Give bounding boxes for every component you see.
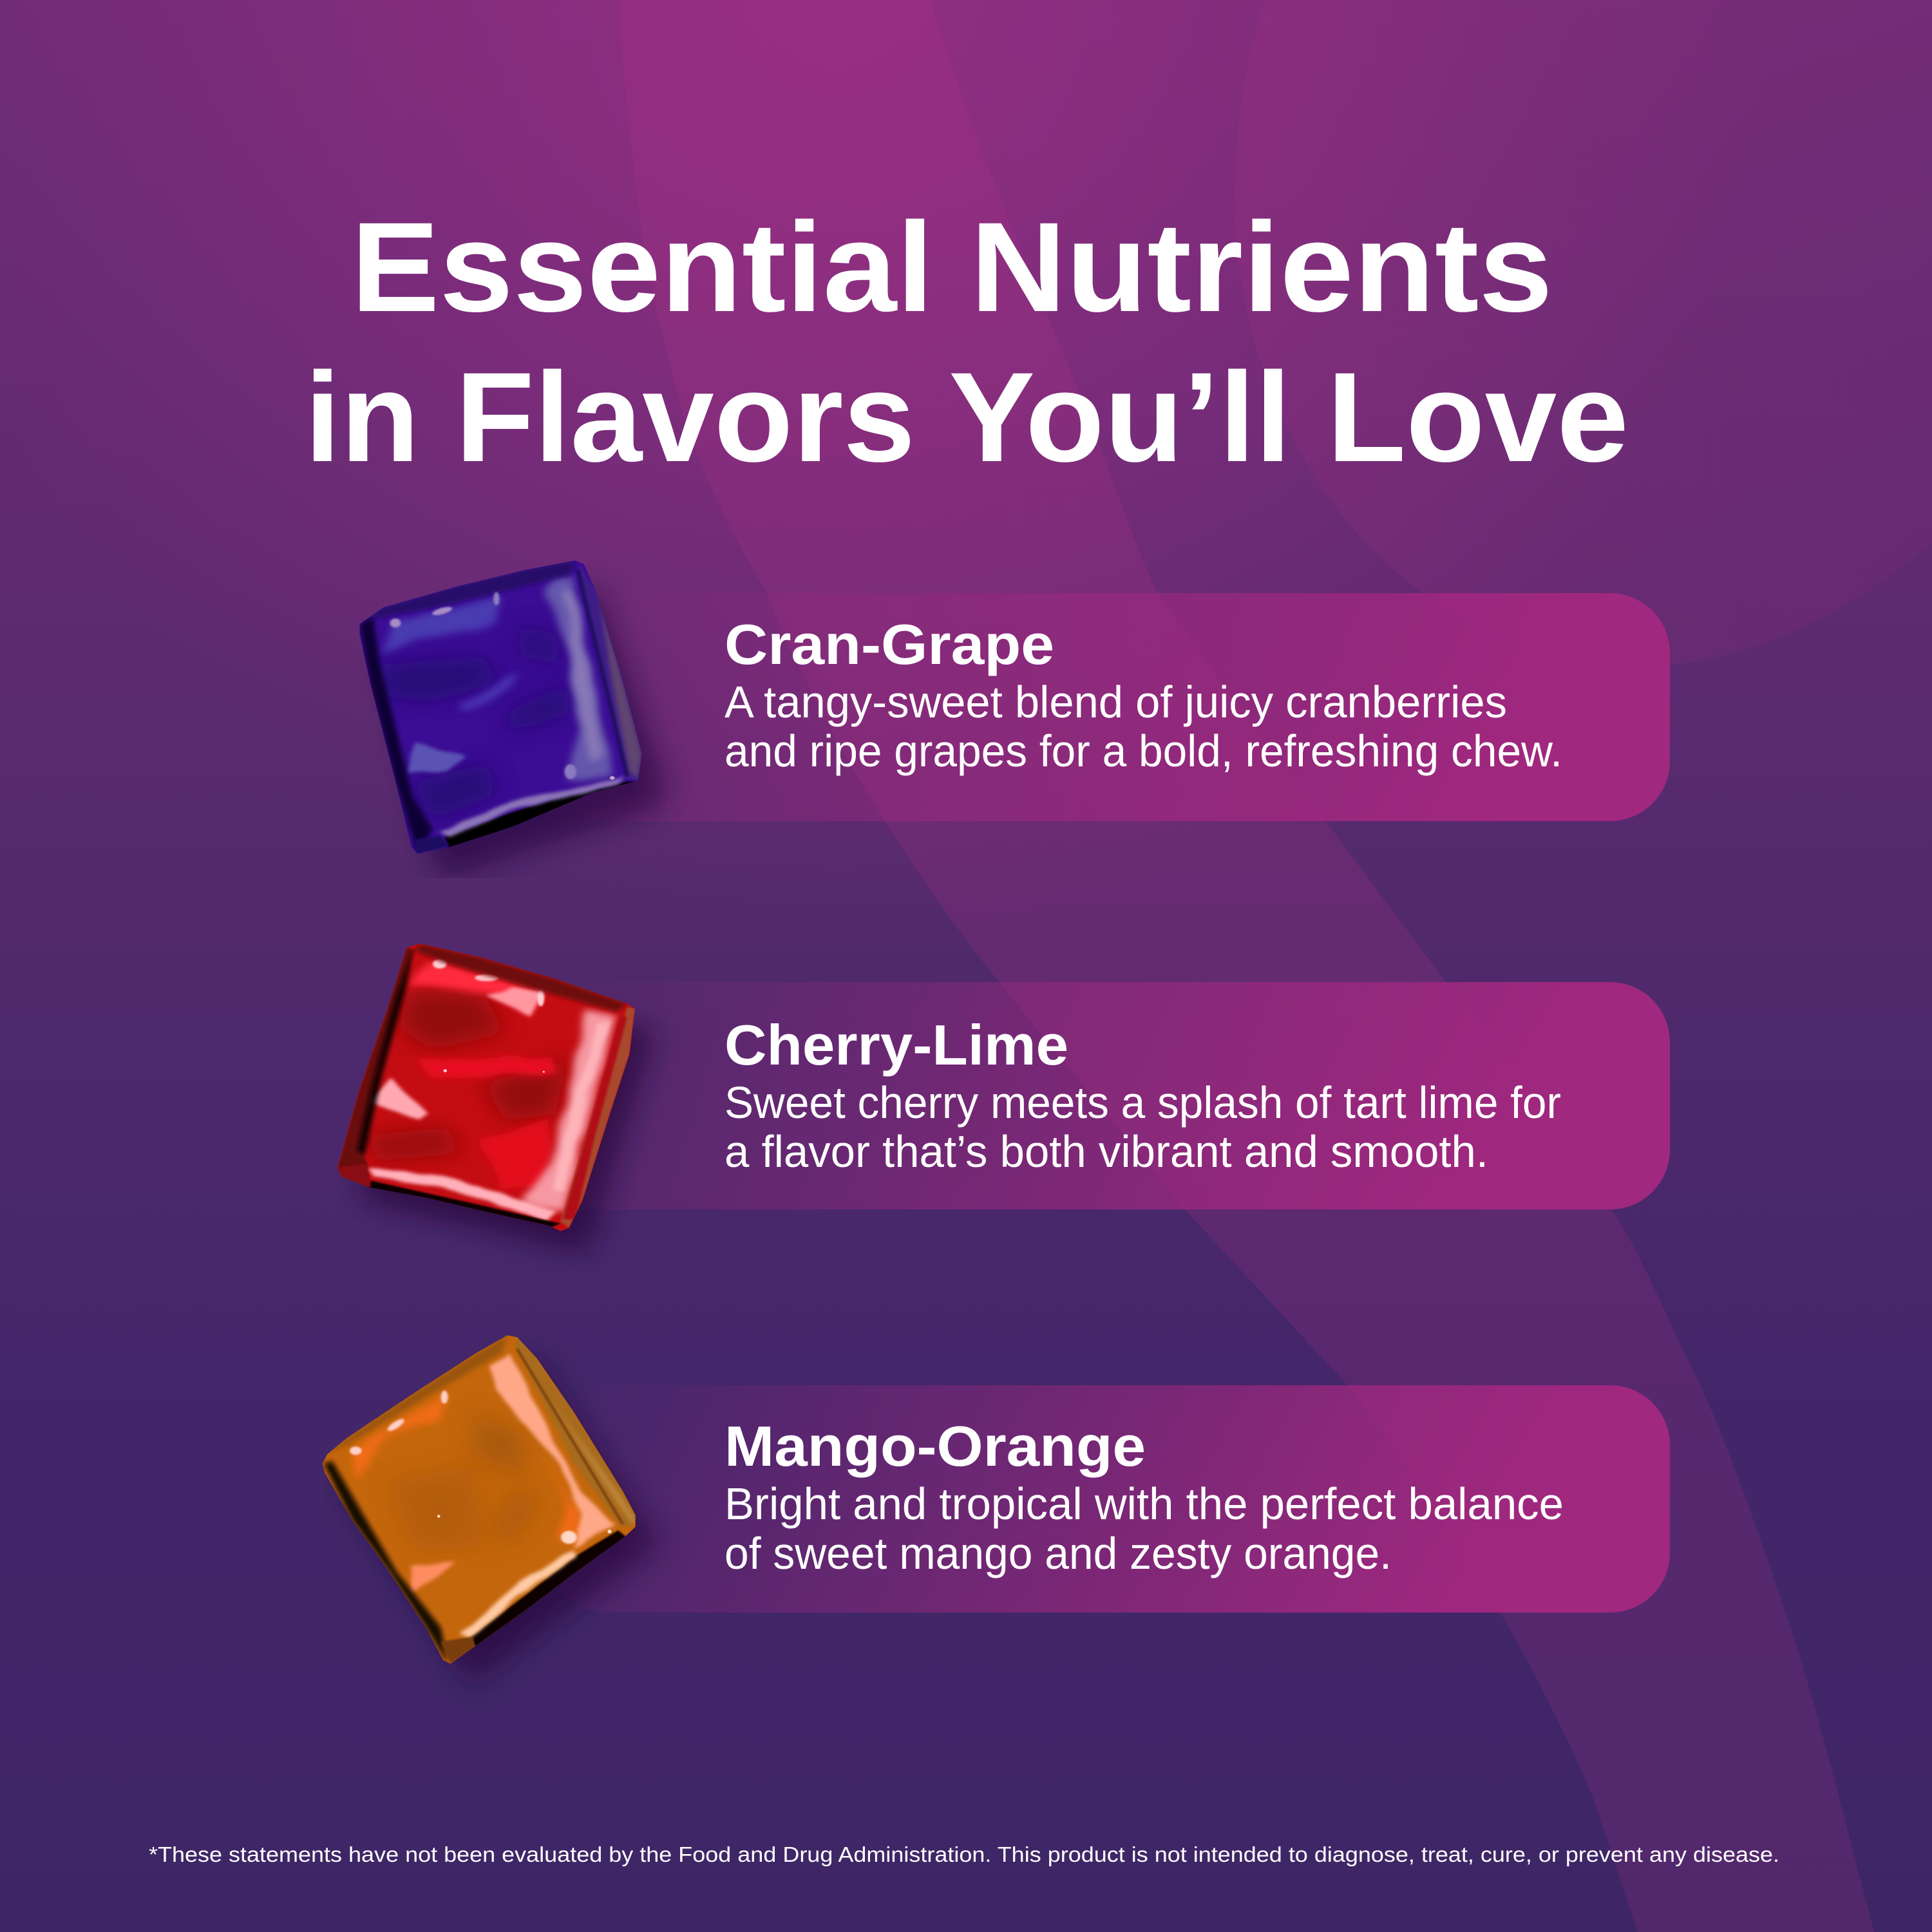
description: Cherry-Lime <box>724 1077 1561 1177</box>
description: Mango-Orange <box>724 1479 1564 1578</box>
icon: red candy <box>337 943 655 1251</box>
title: in Flavors You’ll Love <box>305 346 1629 488</box>
description: Cran-Grape: and ripe grapes for a bold, refreshing chew. <box>724 726 1562 776</box>
background glow <box>0 0 1932 1095</box>
icon: purple candy <box>359 560 664 880</box>
heading: Cran-Grape: Cran-Grape <box>724 612 1054 676</box>
description: Mango-Orange: Bright and tropical with the perfect balance <box>724 1479 1564 1529</box>
card: Cran-Grape <box>547 593 1670 821</box>
text block: Cherry-Lime <box>724 1013 1561 1177</box>
text block: Mango-Orange <box>724 1414 1564 1578</box>
description: Cherry-Lime: a flavor that’s both vibrant and smooth. <box>724 1126 1488 1177</box>
description: Cran-Grape <box>724 677 1562 776</box>
text block: Cran-Grape <box>724 612 1562 776</box>
card: Mango-Orange <box>547 1385 1670 1613</box>
heading: Mango-Orange: Mango-Orange <box>724 1414 1146 1478</box>
title <box>305 196 1629 488</box>
description: Cherry-Lime: Sweet cherry meets a splash of tart lime for <box>724 1077 1561 1128</box>
heading: Cherry-Lime: Cherry-Lime <box>724 1013 1068 1077</box>
disclaimer: *These statements have not been evaluated by the Food and Drug Administration. This product is not intended to diagnose, treat, cure, or prevent any disease. <box>149 1842 1779 1866</box>
description: Mango-Orange: of sweet mango and zesty orange. <box>724 1528 1392 1578</box>
background ribbon shape <box>619 0 1874 1932</box>
description: Cran-Grape: A tangy-sweet blend of juicy cranberries <box>724 677 1507 727</box>
icon: orange candy <box>323 1335 655 1685</box>
card: Cherry-Lime <box>547 982 1670 1209</box>
background circle shape <box>1235 0 1932 666</box>
title: Essential Nutrients <box>351 196 1553 338</box>
